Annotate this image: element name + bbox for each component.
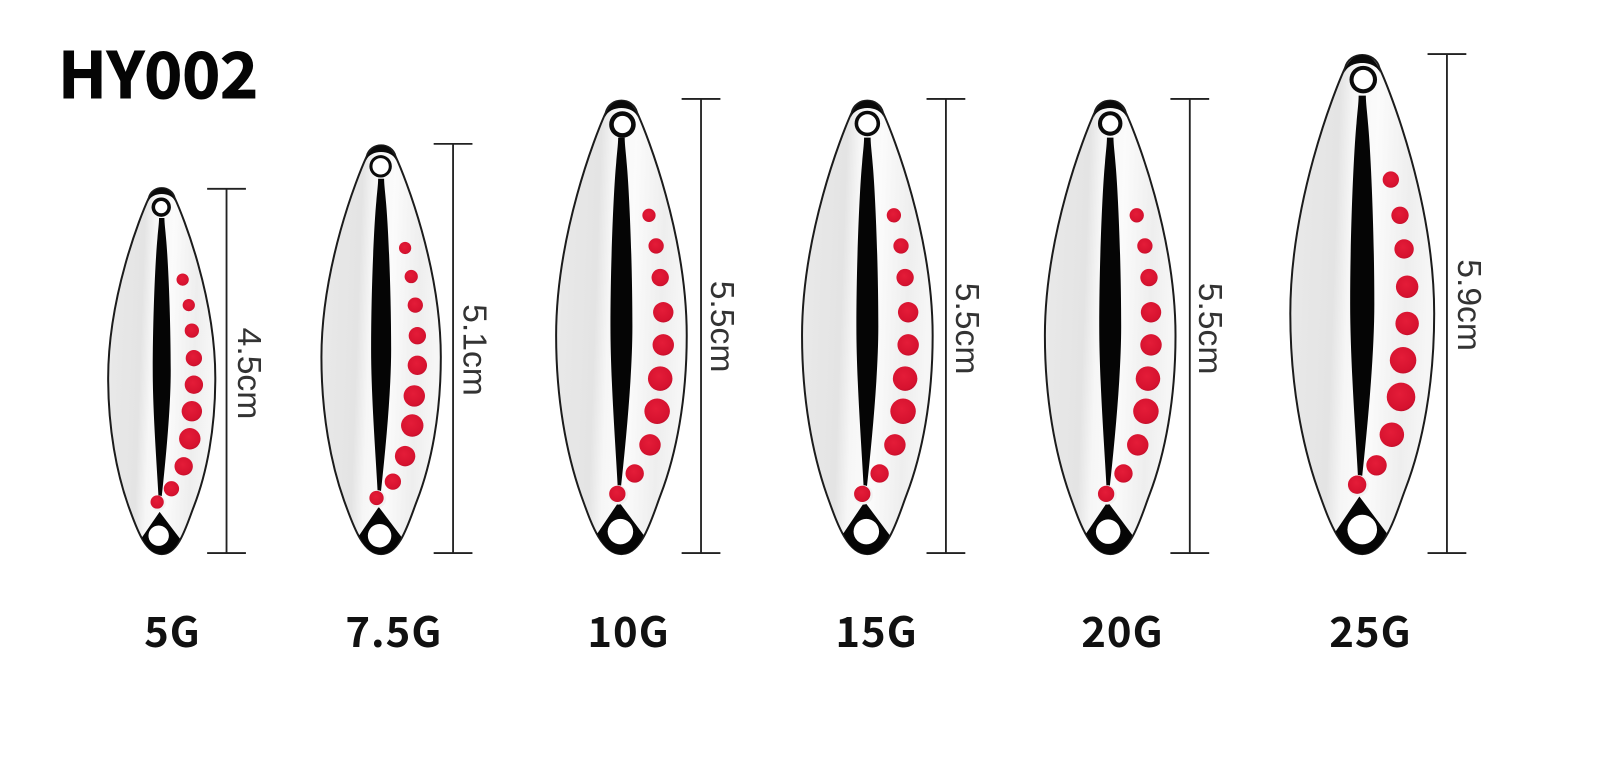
lure item: 10G: [556, 99, 740, 660]
weight label 20G: 20G: [1081, 599, 1164, 660]
lure item: 15G: [802, 99, 985, 660]
dimension line 5.1cm: [434, 144, 472, 553]
lure item: 5G: [108, 188, 267, 660]
weight label 10G: 10G: [587, 599, 670, 660]
dimension label 5.9cm: 5.9cm: [1450, 259, 1487, 351]
lure body 20G: [1045, 101, 1176, 554]
dimension label 4.5cm: 4.5cm: [230, 328, 267, 419]
lure body 5G: [108, 188, 215, 554]
dimension label 5.5cm: 5.5cm: [948, 283, 985, 374]
dimension label 5.5cm: 5.5cm: [1191, 283, 1228, 374]
lure item: 7.5G: [321, 144, 492, 660]
lure body 10G: [556, 101, 687, 554]
dimension line 5.9cm: [1428, 54, 1466, 553]
lure item: 25G: [1290, 54, 1487, 660]
lure body 7.5G: [321, 145, 441, 554]
weight label 25G: 25G: [1329, 599, 1412, 660]
dimension label 5.1cm: 5.1cm: [455, 304, 492, 396]
weight label 5G: 5G: [144, 599, 201, 660]
dimension line 4.5cm: [207, 189, 246, 553]
dimension line 5.5cm: [682, 99, 720, 553]
lure item: 20G: [1045, 99, 1228, 660]
weight label 7.5G: 7.5G: [345, 599, 442, 660]
lure body 15G: [802, 101, 933, 554]
title: HY002: [58, 26, 258, 117]
lure body 25G: [1290, 55, 1434, 554]
dimension label 5.5cm: 5.5cm: [703, 281, 740, 372]
dimension line 5.5cm: [1170, 99, 1209, 553]
dimension line 5.5cm: [927, 99, 965, 553]
weight label 15G: 15G: [835, 599, 918, 660]
